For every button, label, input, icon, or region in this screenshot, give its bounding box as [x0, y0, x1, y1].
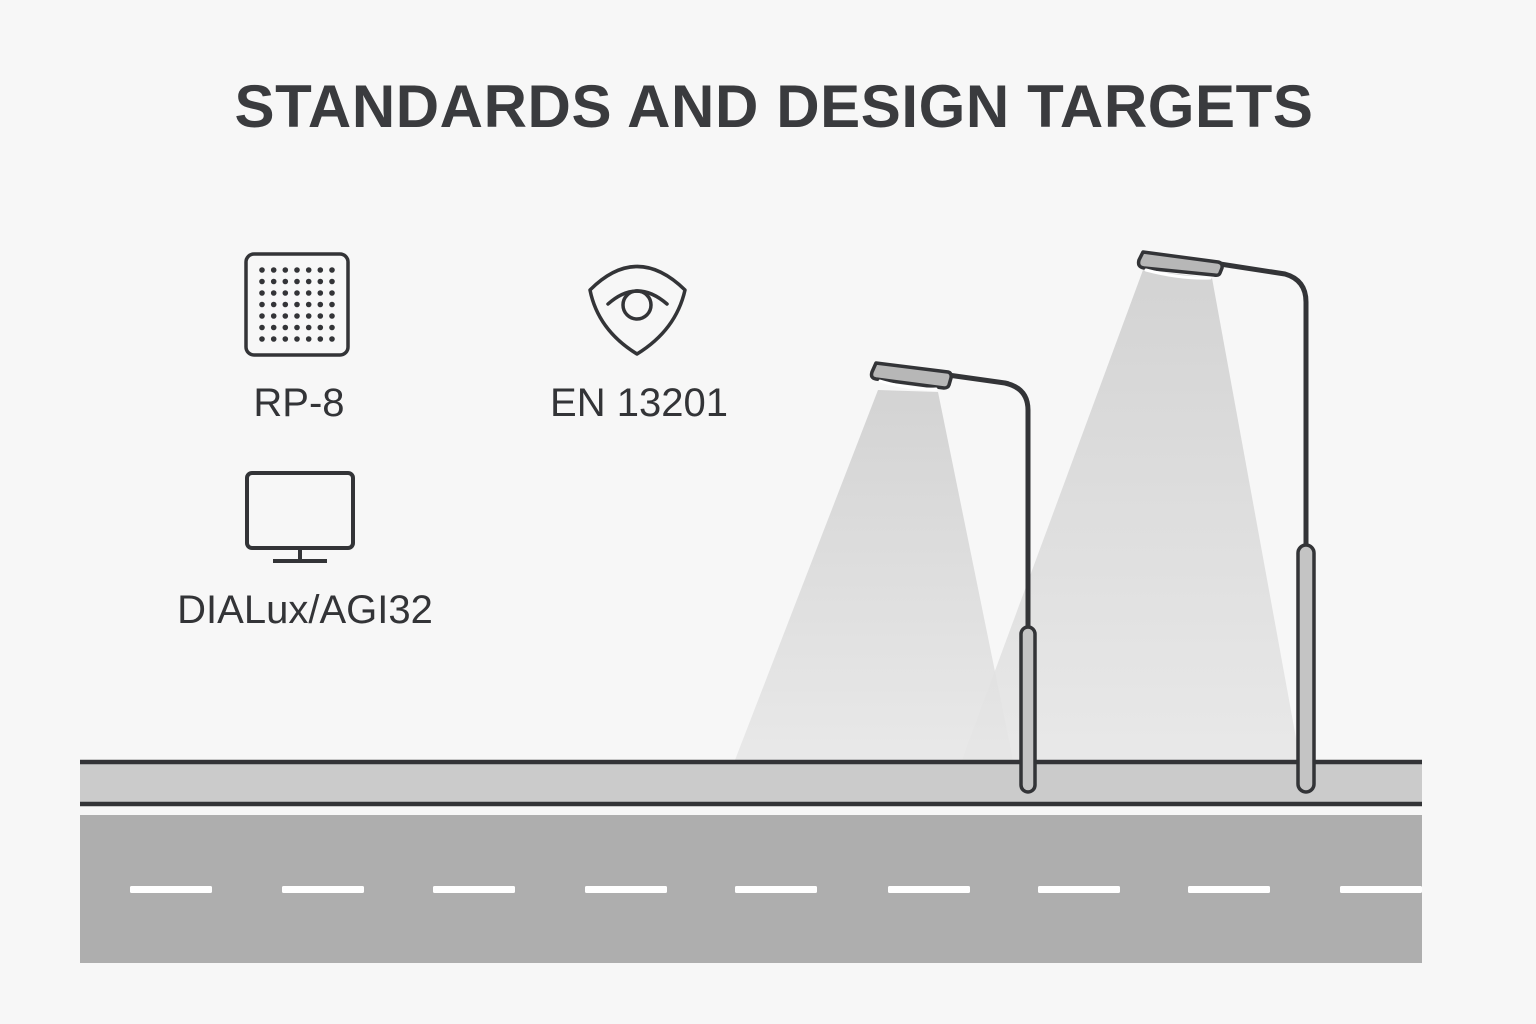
street lamp 2 — [1139, 252, 1314, 792]
label: DIALux/AGI32: DIALux/AGI32 — [177, 588, 433, 632]
icon: RP-8 grid — [246, 254, 348, 355]
street lamp 1 — [872, 363, 1035, 792]
road — [80, 815, 1422, 963]
sidewalk — [80, 762, 1422, 804]
label: EN 13201: EN 13201 — [550, 381, 728, 425]
light beam: lamp 1 — [735, 390, 1013, 760]
title: STANDARDS AND DESIGN TARGETS — [234, 73, 1314, 140]
label: RP-8: RP-8 — [253, 381, 345, 425]
light beam: lamp 2 — [962, 270, 1300, 760]
icon: monitor — [247, 473, 353, 561]
icon: eye shield — [590, 266, 685, 354]
